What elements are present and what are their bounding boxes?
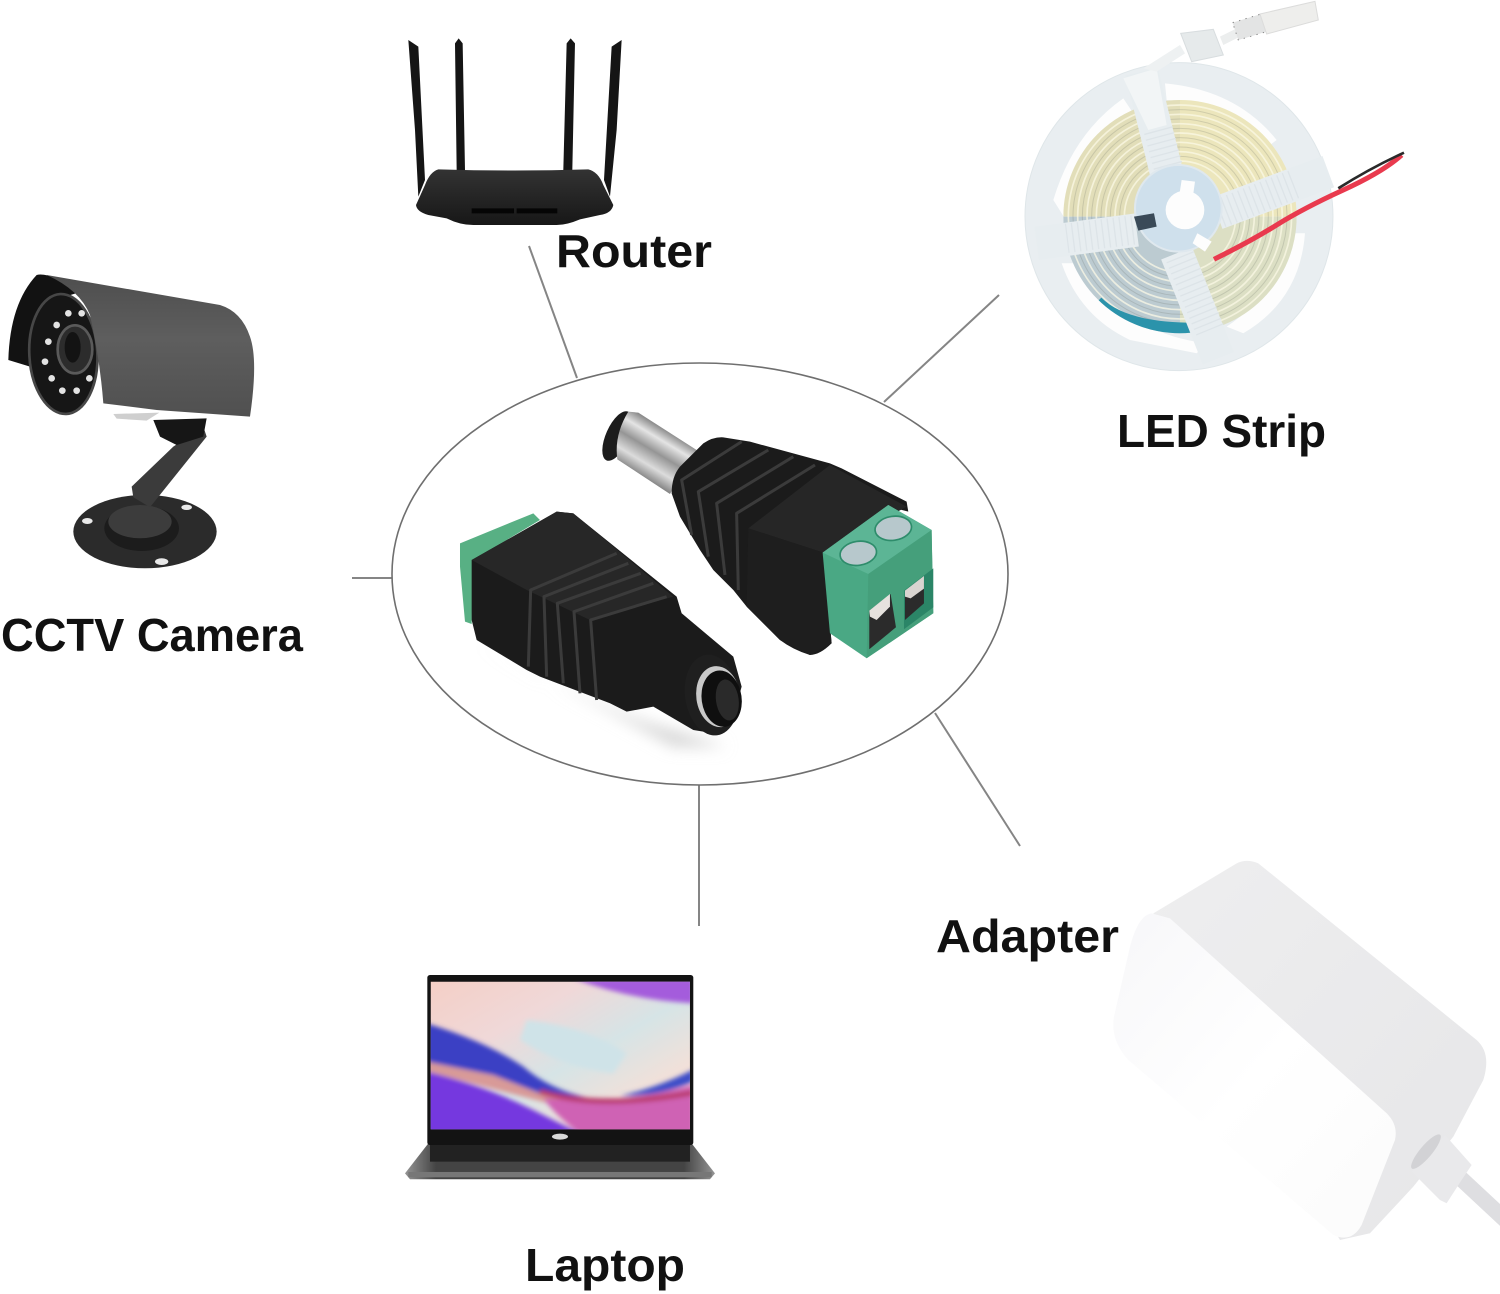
teal section — [1097, 302, 1193, 328]
icon: router — [408, 38, 622, 225]
label: Adapter: Adapter — [936, 910, 1119, 962]
lens — [58, 325, 92, 373]
male green terminal — [823, 505, 933, 658]
shadow — [477, 643, 727, 747]
icon: LED strip reel — [1025, 1, 1404, 371]
male ribbed body — [672, 437, 908, 655]
terminal windows — [869, 594, 896, 649]
icon: power adapter — [1113, 861, 1500, 1240]
label: Router: Router — [556, 225, 712, 277]
label: CCTV Camera: CCTV Camera — [1, 609, 303, 661]
red and black wire — [1214, 155, 1402, 259]
logo — [552, 1134, 568, 1140]
label: Laptop: Laptop — [525, 1239, 685, 1291]
male barrel tip — [596, 407, 639, 465]
screen wallpaper — [427, 978, 693, 1133]
outer reel ring — [1025, 63, 1333, 371]
infrared LEDs — [42, 310, 93, 394]
reel spokes — [1037, 72, 1328, 358]
base and keyboard — [405, 1143, 715, 1179]
strain relief — [1412, 1135, 1472, 1203]
female green back — [460, 513, 540, 624]
hood — [8, 274, 87, 367]
housing — [1153, 861, 1486, 1240]
hub — [1135, 165, 1222, 252]
lid — [427, 975, 693, 1145]
icon: female and male DC connectors — [460, 407, 933, 747]
front ring — [26, 292, 100, 416]
white slots in the reel — [1053, 83, 1305, 353]
female body — [472, 512, 742, 733]
router body — [416, 169, 613, 225]
underside label — [113, 413, 159, 421]
screws — [838, 539, 878, 568]
cable entry ring — [1407, 1131, 1445, 1172]
white front face — [1113, 913, 1396, 1238]
coiled strip — [1063, 100, 1297, 333]
antennas — [408, 38, 622, 197]
arm — [132, 427, 207, 507]
icon: CCTV camera — [8, 274, 254, 568]
connector lines — [352, 246, 1020, 926]
label: LED Strip: LED Strip — [1117, 405, 1326, 457]
female barrel mouth — [680, 651, 744, 739]
housing — [47, 275, 254, 417]
front slot — [472, 208, 557, 213]
male metal barrel — [617, 412, 697, 494]
central ellipse — [392, 363, 1008, 785]
white DC plug and cable — [1143, 45, 1185, 72]
cable — [1450, 1168, 1500, 1223]
mount base — [73, 495, 217, 568]
icon: laptop — [405, 975, 715, 1179]
